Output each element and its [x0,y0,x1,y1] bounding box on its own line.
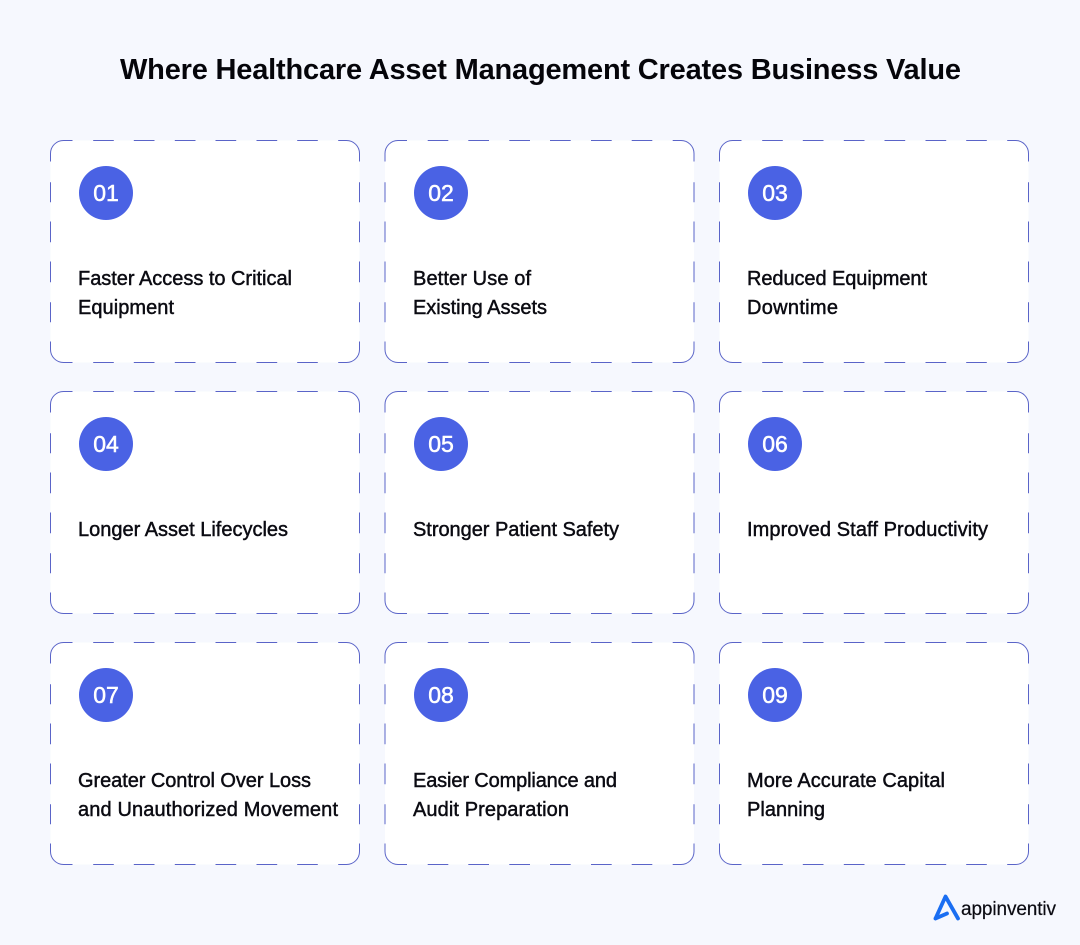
card 08: Easier Compliance and [413,770,617,792]
card 02: Better Use of [413,268,531,290]
card 03: Downtime [747,297,838,319]
card 08: 08 [428,682,454,708]
card 01: 01 [93,180,119,206]
card 07: Greater Control Over Loss [78,770,311,792]
card 01: Equipment [78,297,174,319]
card 07 [50,642,360,864]
card 06 [720,392,1028,614]
card 04 [50,392,360,614]
card 01 [50,140,360,362]
card 08: Audit Preparation [413,799,569,821]
card 09 [720,642,1028,864]
card 05 [385,392,694,614]
card 09: More Accurate Capital [747,770,945,792]
card 03: 03 [762,180,788,206]
card 03: Reduced Equipment [747,268,927,290]
card 03 [720,140,1028,362]
card 06: Improved Staff Productivity [747,519,988,541]
card 04: Longer Asset Lifecycles [78,519,288,541]
card 04: 04 [93,431,119,457]
logo: appinventiv: appinventiv [961,899,1056,920]
card 07: and Unauthorized Movement [78,799,338,821]
card 06: 06 [762,431,788,457]
card 02: Existing Assets [413,297,547,319]
card 05: 05 [428,431,454,457]
card 07: 07 [93,682,119,708]
card 08 [385,642,694,864]
card 05: Stronger Patient Safety [413,519,619,541]
card 01: Faster Access to Critical [78,268,292,290]
title: Where Healthcare Asset Management Creates Business Value [120,54,961,86]
card 09: Planning [747,799,825,821]
card 02: 02 [428,180,454,206]
card 02 [385,140,694,362]
card 09: 09 [762,682,788,708]
